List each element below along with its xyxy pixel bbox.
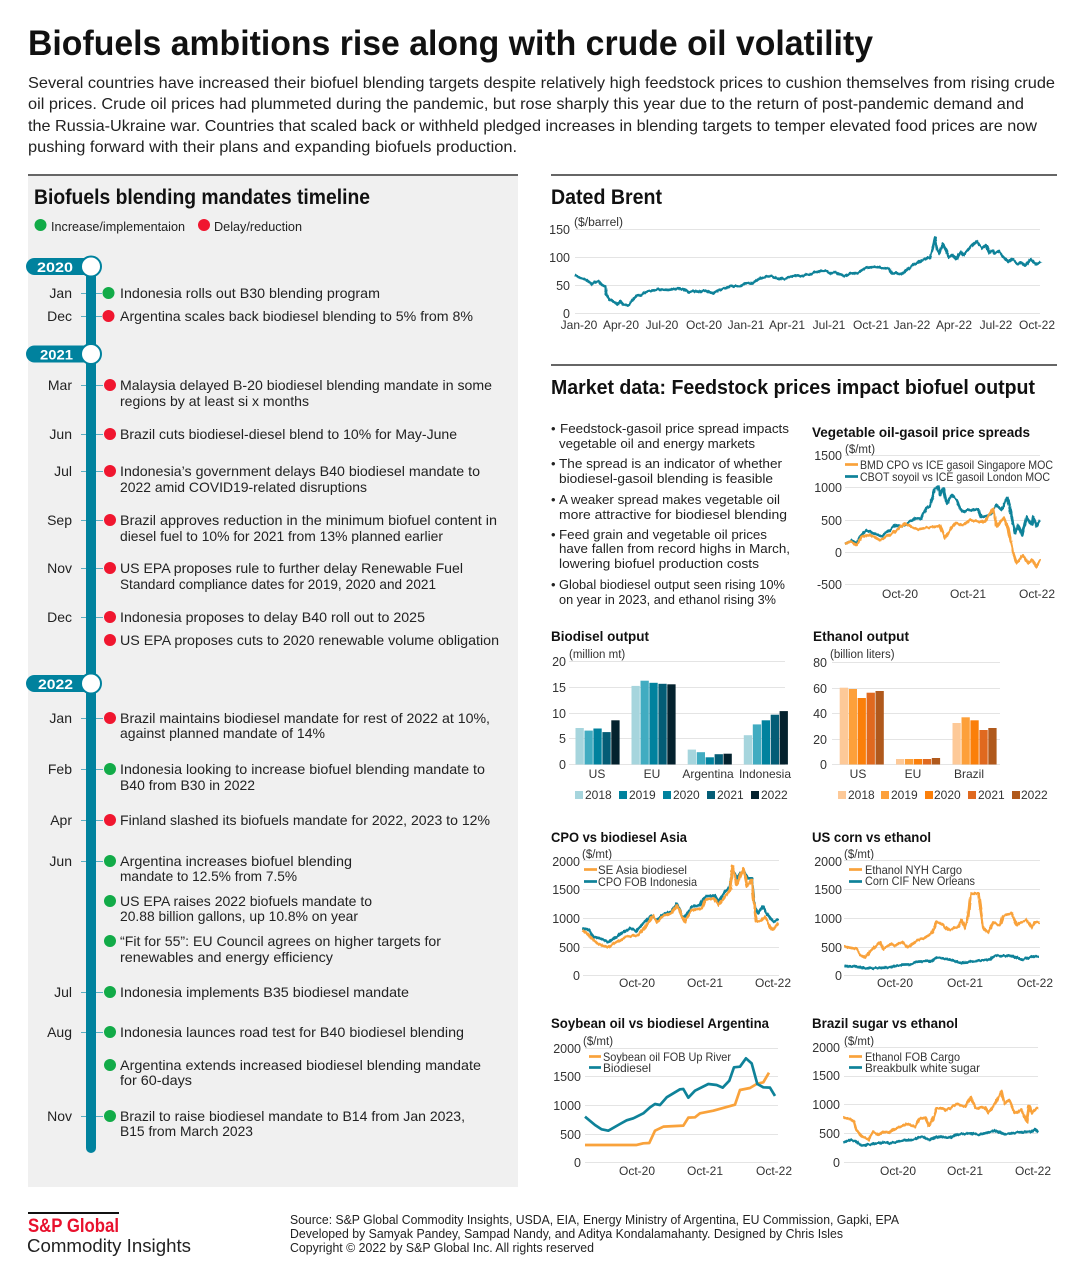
line chart: CPO vs biodiesel Asia: CPO vs biodiesel Asia bbox=[551, 829, 687, 845]
legend: status bbox=[34, 219, 302, 234]
line chart: dated brent: Jul-21 bbox=[813, 318, 846, 332]
line chart: Brazil sugar vs ethanol: 500 bbox=[819, 1127, 840, 1141]
line chart: US corn vs ethanol: 2000 bbox=[814, 855, 842, 869]
line chart: US corn vs ethanol: Ethanol NYH Cargo bbox=[865, 863, 962, 877]
source and credits: Developed by Samyak Pandey, Sampad Nandy, and Aditya Kondalamahanty. Designed by Chris Isles bbox=[290, 1227, 843, 1241]
line chart: CPO vs biodiesel Asia: 1000 bbox=[552, 912, 580, 926]
bar chart: ethanol output: US bbox=[850, 767, 866, 781]
logo: S&amp;P Global Commodity Insights: S&P Global bbox=[28, 1216, 119, 1237]
bullet list: lowering biofuel production costs bbox=[559, 556, 760, 571]
bar chart: biodiesel output: (million mt) bbox=[569, 649, 625, 661]
intro text block bbox=[28, 75, 1055, 156]
events 2022: Brazil maintains biodiesel mandate for rest of 2022 at 10%, bbox=[120, 710, 490, 726]
panel: market data bbox=[551, 364, 1057, 1178]
line chart: Brazil sugar vs ethanol: 1500 bbox=[812, 1069, 840, 1083]
bullet list: have fallen from record highs in March, bbox=[559, 541, 790, 556]
line chart: vegetable oil-gasoil price spreads: 0 bbox=[835, 546, 842, 560]
events 2021: Malaysia delayed B-20 biodiesel blending mandate in some bbox=[120, 377, 492, 393]
line chart: dated brent: 100 bbox=[549, 251, 570, 265]
line chart: soybean oil vs biodiesel Argentina: 0 bbox=[574, 1156, 581, 1170]
line chart: vegetable oil-gasoil price spreads: Oct-21 bbox=[950, 587, 986, 601]
line chart: dated brent bbox=[549, 217, 1055, 332]
bullet list: • bbox=[551, 577, 556, 592]
bar chart: ethanol output: 80 bbox=[813, 656, 827, 670]
line chart: dated brent: Jul-22 bbox=[980, 318, 1013, 332]
bar chart: biodiesel output: Indonesia bbox=[739, 767, 791, 781]
events 2022: against planned mandate of 14% bbox=[120, 725, 325, 741]
events 2022: Finland slashed its biofuels mandate for 2022, 2023 to 12% bbox=[120, 812, 490, 828]
events 2021: diesel fuel to 10% for 2021 from 13% planned earlier bbox=[120, 528, 443, 544]
bar chart: biodiesel output: 20 bbox=[552, 655, 566, 669]
bullet list: • bbox=[551, 527, 556, 542]
heading: market data: Market data: Feedstock prices impact biofuel output bbox=[551, 376, 1035, 399]
line chart: dated brent: Apr-22 bbox=[936, 318, 972, 332]
line chart: CPO vs biodiesel Asia: 0 bbox=[573, 969, 580, 983]
line chart: Brazil sugar vs ethanol: Brazil sugar vs ethanol bbox=[812, 1015, 958, 1031]
events 2021: Jul bbox=[54, 463, 72, 479]
line chart: Brazil sugar vs ethanol: Oct-21 bbox=[947, 1164, 983, 1178]
line chart: soybean oil vs biodiesel Argentina: 1000 bbox=[553, 1099, 581, 1113]
events 2022: B15 from March 2023 bbox=[120, 1123, 253, 1139]
year marker 2022 bbox=[26, 674, 101, 694]
line chart: Brazil sugar vs ethanol bbox=[812, 1015, 1051, 1178]
bar chart: biodiesel output: 2021 bbox=[717, 788, 744, 802]
line chart: CPO vs biodiesel Asia: ($/mt) bbox=[582, 849, 612, 861]
events 2021: US EPA proposes rule to further delay Renewable Fuel bbox=[120, 560, 463, 576]
events 2022: for 60-days bbox=[120, 1072, 192, 1088]
heading: dated brent: Dated Brent bbox=[551, 186, 662, 209]
events 2021: 2022 amid COVID19-related disruptions bbox=[120, 479, 367, 495]
year marker 2021: 2021 bbox=[40, 346, 73, 362]
events 2020 bbox=[47, 285, 473, 324]
bar chart: biodiesel output: US bbox=[589, 767, 605, 781]
events 2022: renewables and energy efficiency bbox=[120, 949, 333, 965]
line chart: CPO vs biodiesel Asia: Oct-21 bbox=[687, 976, 723, 990]
bullet list: • bbox=[551, 492, 556, 507]
line chart: soybean oil vs biodiesel Argentina: ($/mt) bbox=[583, 1036, 613, 1048]
line chart: soybean oil vs biodiesel Argentina: 1500 bbox=[553, 1070, 581, 1084]
events 2022: Nov bbox=[47, 1108, 72, 1124]
events 2021: Indonesia’s government delays B40 biodiesel mandate to bbox=[120, 463, 480, 479]
bar chart: ethanol output: Ethanol output bbox=[813, 628, 909, 644]
events 2021: Sep bbox=[47, 512, 72, 528]
events 2022: B40 from B30 in 2022 bbox=[120, 777, 255, 793]
line chart: dated brent: 50 bbox=[556, 279, 570, 293]
line chart: soybean oil vs biodiesel Argentina: Oct-21 bbox=[687, 1164, 723, 1178]
intro text block: the Russia-Ukraine war. Countries that scaled back or withheld pledged increases in blending targets to temper elevated food prices are now bbox=[28, 118, 1037, 135]
bullet list: more attractive for biodiesel blending bbox=[559, 507, 787, 522]
events 2022: Indonesia implements B35 biodiesel mandate bbox=[120, 984, 409, 1000]
events 2022: Apr bbox=[50, 812, 72, 828]
line chart: dated brent: Apr-20 bbox=[603, 318, 639, 332]
bar chart: ethanol output: 0 bbox=[820, 758, 827, 772]
line chart: CPO vs biodiesel Asia: CPO FOB Indonesia bbox=[598, 875, 697, 889]
bar chart: ethanol output: 2022 bbox=[1021, 788, 1048, 802]
line chart: vegetable oil-gasoil price spreads bbox=[812, 424, 1055, 601]
line chart: vegetable oil-gasoil price spreads: -500 bbox=[817, 578, 842, 592]
events 2021: Mar bbox=[48, 377, 72, 393]
bar chart: biodiesel output: 0 bbox=[559, 758, 566, 772]
line chart: Brazil sugar vs ethanol: ($/mt) bbox=[844, 1036, 874, 1048]
events 2021: US EPA proposes cuts to 2020 renewable volume obligation bbox=[120, 632, 499, 648]
events 2022: Jun bbox=[49, 853, 72, 869]
events 2021 bbox=[47, 377, 499, 648]
bullet list: • bbox=[551, 421, 556, 436]
line chart: dated brent: Jan-21 bbox=[728, 318, 765, 332]
line chart: dated brent: 150 bbox=[549, 223, 570, 237]
events 2021: Brazil approves reduction in the minimum biofuel content in bbox=[120, 512, 497, 528]
line chart: soybean oil vs biodiesel Argentina: 500 bbox=[560, 1128, 581, 1142]
bar chart: ethanol output bbox=[813, 628, 1048, 802]
events 2021: Indonesia proposes to delay B40 roll out to 2025 bbox=[120, 609, 425, 625]
line chart: soybean oil vs biodiesel Argentina: Oct-20 bbox=[619, 1164, 655, 1178]
line chart: dated brent: Oct-22 bbox=[1019, 318, 1055, 332]
year marker 2021 bbox=[26, 344, 101, 364]
line chart: vegetable oil-gasoil price spreads: 1500 bbox=[814, 449, 842, 463]
bar chart: ethanol output: Brazil bbox=[954, 767, 984, 781]
events 2022: Aug bbox=[47, 1024, 72, 1040]
line chart: CPO vs biodiesel Asia: Oct-22 bbox=[755, 976, 791, 990]
events 2022: Jan bbox=[49, 710, 72, 726]
bullet list: A weaker spread makes vegetable oil bbox=[559, 492, 780, 507]
events 2021: Jun bbox=[49, 426, 72, 442]
bullet list: biodiesel-gasoil blending is feasible bbox=[559, 471, 773, 486]
bar chart: ethanol output: 2018 bbox=[848, 788, 875, 802]
line chart: vegetable oil-gasoil price spreads: Oct-20 bbox=[882, 587, 918, 601]
logo: S&amp;P Global Commodity Insights bbox=[27, 1212, 191, 1256]
bar chart: biodiesel output: 2022 bbox=[761, 788, 788, 802]
line chart: US corn vs ethanol: Oct-22 bbox=[1017, 976, 1053, 990]
events 2022: mandate to 12.5% from 7.5% bbox=[120, 868, 297, 884]
line chart: vegetable oil-gasoil price spreads: Oct-22 bbox=[1019, 587, 1055, 601]
bullet list: Global biodiesel output seen rising 10% bbox=[559, 577, 785, 592]
line chart: Brazil sugar vs ethanol: Oct-20 bbox=[880, 1164, 916, 1178]
bar chart: biodiesel output: EU bbox=[644, 767, 660, 781]
events 2022: 20.88 billion gallons, up 10.8% on year bbox=[120, 908, 358, 924]
line chart: Brazil sugar vs ethanol: Ethanol FOB Cargo bbox=[865, 1050, 960, 1064]
line chart: Brazil sugar vs ethanol: Breakbulk white sugar bbox=[865, 1061, 980, 1075]
line chart: soybean oil vs biodiesel Argentina: Oct-22 bbox=[756, 1164, 792, 1178]
events 2021: regions by at least si x months bbox=[120, 393, 309, 409]
events 2022: US EPA raises 2022 biofuels mandate to bbox=[120, 893, 372, 909]
bar chart: ethanol output: 2019 bbox=[891, 788, 918, 802]
line chart: dated brent: Oct-20 bbox=[686, 318, 722, 332]
bar chart: ethanol output: 60 bbox=[813, 682, 827, 696]
line chart: dated brent: Jan-22 bbox=[894, 318, 931, 332]
bar chart: biodiesel output: Biodisel output bbox=[551, 628, 649, 644]
year marker 2020 bbox=[26, 256, 101, 276]
bar chart: ethanol output: (billion liters) bbox=[830, 649, 895, 661]
line chart: US corn vs ethanol bbox=[812, 829, 1053, 990]
bar chart: biodiesel output bbox=[551, 628, 791, 802]
bar chart: ethanol output: 40 bbox=[813, 707, 827, 721]
events 2021: Dec bbox=[47, 609, 72, 625]
bar chart: biodiesel output: 15 bbox=[552, 681, 566, 695]
intro text block: pushing forward with their plans and expanding biofuels production. bbox=[28, 139, 517, 156]
line chart: vegetable oil-gasoil price spreads: ($/mt) bbox=[845, 444, 875, 456]
events 2022: Indonesia launces road test for B40 biodiesel blending bbox=[120, 1024, 464, 1040]
events 2022: Feb bbox=[48, 761, 72, 777]
line chart: CPO vs biodiesel Asia: SE Asia biodiesel bbox=[598, 863, 687, 877]
bar chart: biodiesel output: Argentina bbox=[682, 767, 734, 781]
bar chart: ethanol output: EU bbox=[905, 767, 921, 781]
events 2020: Indonesia rolls out B30 blending program bbox=[120, 285, 380, 301]
line chart: CPO vs biodiesel Asia bbox=[551, 829, 791, 990]
line chart: US corn vs ethanol: Oct-20 bbox=[877, 976, 913, 990]
source and credits: Source: S&P Global Commodity Insights, USDA, EIA, Energy Ministry of Argentina, EU Commission, Gapki, EPA bbox=[290, 1213, 900, 1227]
bar chart: biodiesel output: 10 bbox=[552, 707, 566, 721]
line chart: vegetable oil-gasoil price spreads: BMD CPO vs ICE gasoil Singapore MOC bbox=[860, 458, 1053, 472]
events 2020: Dec bbox=[47, 308, 72, 324]
events 2020: Argentina scales back biodiesel blending to 5% from 8% bbox=[120, 308, 473, 324]
line chart: Brazil sugar vs ethanol: 0 bbox=[833, 1156, 840, 1170]
events 2021: Brazil cuts biodiesel-diesel blend to 10% for May-June bbox=[120, 426, 457, 442]
events 2022: Argentina increases biofuel blending bbox=[120, 853, 352, 869]
timeline axis bbox=[86, 266, 96, 1153]
title: Biofuels ambitions rise along with crude oil volatility bbox=[28, 24, 874, 63]
bar chart: biodiesel output: 2019 bbox=[629, 788, 656, 802]
bar chart: ethanol output: 2020 bbox=[934, 788, 961, 802]
line chart: soybean oil vs biodiesel Argentina: Soybean oil vs biodiesel Argentina bbox=[551, 1015, 769, 1031]
bullet list: vegetable oil and energy markets bbox=[559, 436, 755, 451]
bar chart: ethanol output: 20 bbox=[813, 733, 827, 747]
events 2021: Standard compliance dates for 2019, 2020 and 2021 bbox=[120, 576, 436, 592]
events 2022: Brazil to raise biodiesel mandate to B14 from Jan 2023, bbox=[120, 1108, 465, 1124]
line chart: US corn vs ethanol: US corn vs ethanol bbox=[812, 829, 931, 845]
line chart: dated brent: Apr-21 bbox=[769, 318, 805, 332]
line chart: dated brent: Oct-21 bbox=[853, 318, 889, 332]
line chart: dated brent: Jan-20 bbox=[561, 318, 598, 332]
bullet list bbox=[551, 421, 790, 607]
line chart: dated brent: 0 bbox=[563, 307, 570, 321]
bullet list: Feedstock-gasoil price spread impacts bbox=[560, 421, 790, 436]
line chart: CPO vs biodiesel Asia: 2000 bbox=[552, 855, 580, 869]
bullet list: Feed grain and vegetable oil prices bbox=[559, 527, 768, 542]
bullet list: on year in 2023, and ethanol rising 3% bbox=[559, 592, 776, 607]
bar chart: ethanol output: 2021 bbox=[978, 788, 1005, 802]
events 2022: Jul bbox=[54, 984, 72, 1000]
events 2022 bbox=[47, 710, 490, 1139]
line chart: Brazil sugar vs ethanol: 2000 bbox=[812, 1041, 840, 1055]
line chart: US corn vs ethanol: ($/mt) bbox=[844, 849, 874, 861]
line chart: US corn vs ethanol: Oct-21 bbox=[947, 976, 983, 990]
line chart: US corn vs ethanol: 1000 bbox=[814, 912, 842, 926]
logo: S&amp;P Global Commodity Insights: Commodity Insights bbox=[27, 1235, 191, 1256]
line chart: dated brent: ($/barrel) bbox=[574, 217, 623, 229]
events 2020: Jan bbox=[49, 285, 72, 301]
line chart: US corn vs ethanol: 1500 bbox=[814, 883, 842, 897]
line chart: vegetable oil-gasoil price spreads: 500 bbox=[821, 514, 842, 528]
panel: dated brent bbox=[549, 174, 1057, 332]
intro text block: Several countries have increased their biofuel blending targets despite relatively high feedstock prices to cushion themselves from rising crude bbox=[28, 75, 1055, 92]
line chart: CPO vs biodiesel Asia: 500 bbox=[559, 941, 580, 955]
year marker 2020: 2020 bbox=[37, 259, 73, 275]
bullet list: • bbox=[551, 456, 556, 471]
line chart: soybean oil vs biodiesel Argentina bbox=[551, 1015, 792, 1178]
line chart: Brazil sugar vs ethanol: Oct-22 bbox=[1015, 1164, 1051, 1178]
bar chart: biodiesel output: 5 bbox=[559, 732, 566, 746]
source and credits bbox=[290, 1213, 900, 1255]
line chart: dated brent: Jul-20 bbox=[646, 318, 679, 332]
events 2022: “Fit for 55”: EU Council agrees on higher targets for bbox=[120, 933, 441, 949]
bullet list: The spread is an indicator of whether bbox=[559, 456, 783, 471]
line chart: soybean oil vs biodiesel Argentina: Biodiesel bbox=[603, 1061, 651, 1075]
bar chart: biodiesel output: 2020 bbox=[673, 788, 700, 802]
line chart: soybean oil vs biodiesel Argentina: Soybean oil FOB Up River bbox=[603, 1050, 731, 1064]
bar chart: biodiesel output: 2018 bbox=[585, 788, 612, 802]
intro text block: oil prices. Crude oil prices had plummeted during the pandemic, but rose sharply this year due to the return of post-pandemic demand and bbox=[28, 96, 1024, 113]
source and credits: Copyright © 2022 by S&P Global Inc. All rights reserved bbox=[290, 1241, 594, 1255]
heading: timeline: Biofuels blending mandates timeline bbox=[34, 186, 370, 209]
events 2022: Argentina extends increased biodiesel blending mandate bbox=[120, 1057, 481, 1073]
line chart: soybean oil vs biodiesel Argentina: 2000 bbox=[553, 1042, 581, 1056]
legend: status: Delay/reduction bbox=[214, 220, 302, 234]
legend: status: Increase/implementaion bbox=[51, 220, 185, 234]
line chart: vegetable oil-gasoil price spreads: 1000 bbox=[814, 481, 842, 495]
line chart: vegetable oil-gasoil price spreads: CBOT soyoil vs ICE gasoil London MOC bbox=[860, 470, 1050, 484]
line chart: US corn vs ethanol: Corn CIF New Orleans bbox=[865, 874, 975, 888]
line chart: US corn vs ethanol: 0 bbox=[835, 969, 842, 983]
panel: timeline bbox=[26, 174, 518, 1187]
year marker 2022: 2022 bbox=[38, 676, 73, 692]
events 2022: Indonesia looking to increase biofuel blending mandate to bbox=[120, 761, 485, 777]
line chart: Brazil sugar vs ethanol: 1000 bbox=[812, 1098, 840, 1112]
line chart: CPO vs biodiesel Asia: 1500 bbox=[552, 883, 580, 897]
line chart: CPO vs biodiesel Asia: Oct-20 bbox=[619, 976, 655, 990]
events 2021: Nov bbox=[47, 560, 72, 576]
line chart: US corn vs ethanol: 500 bbox=[821, 941, 842, 955]
line chart: vegetable oil-gasoil price spreads: Vegetable oil-gasoil price spreads bbox=[812, 424, 1030, 440]
